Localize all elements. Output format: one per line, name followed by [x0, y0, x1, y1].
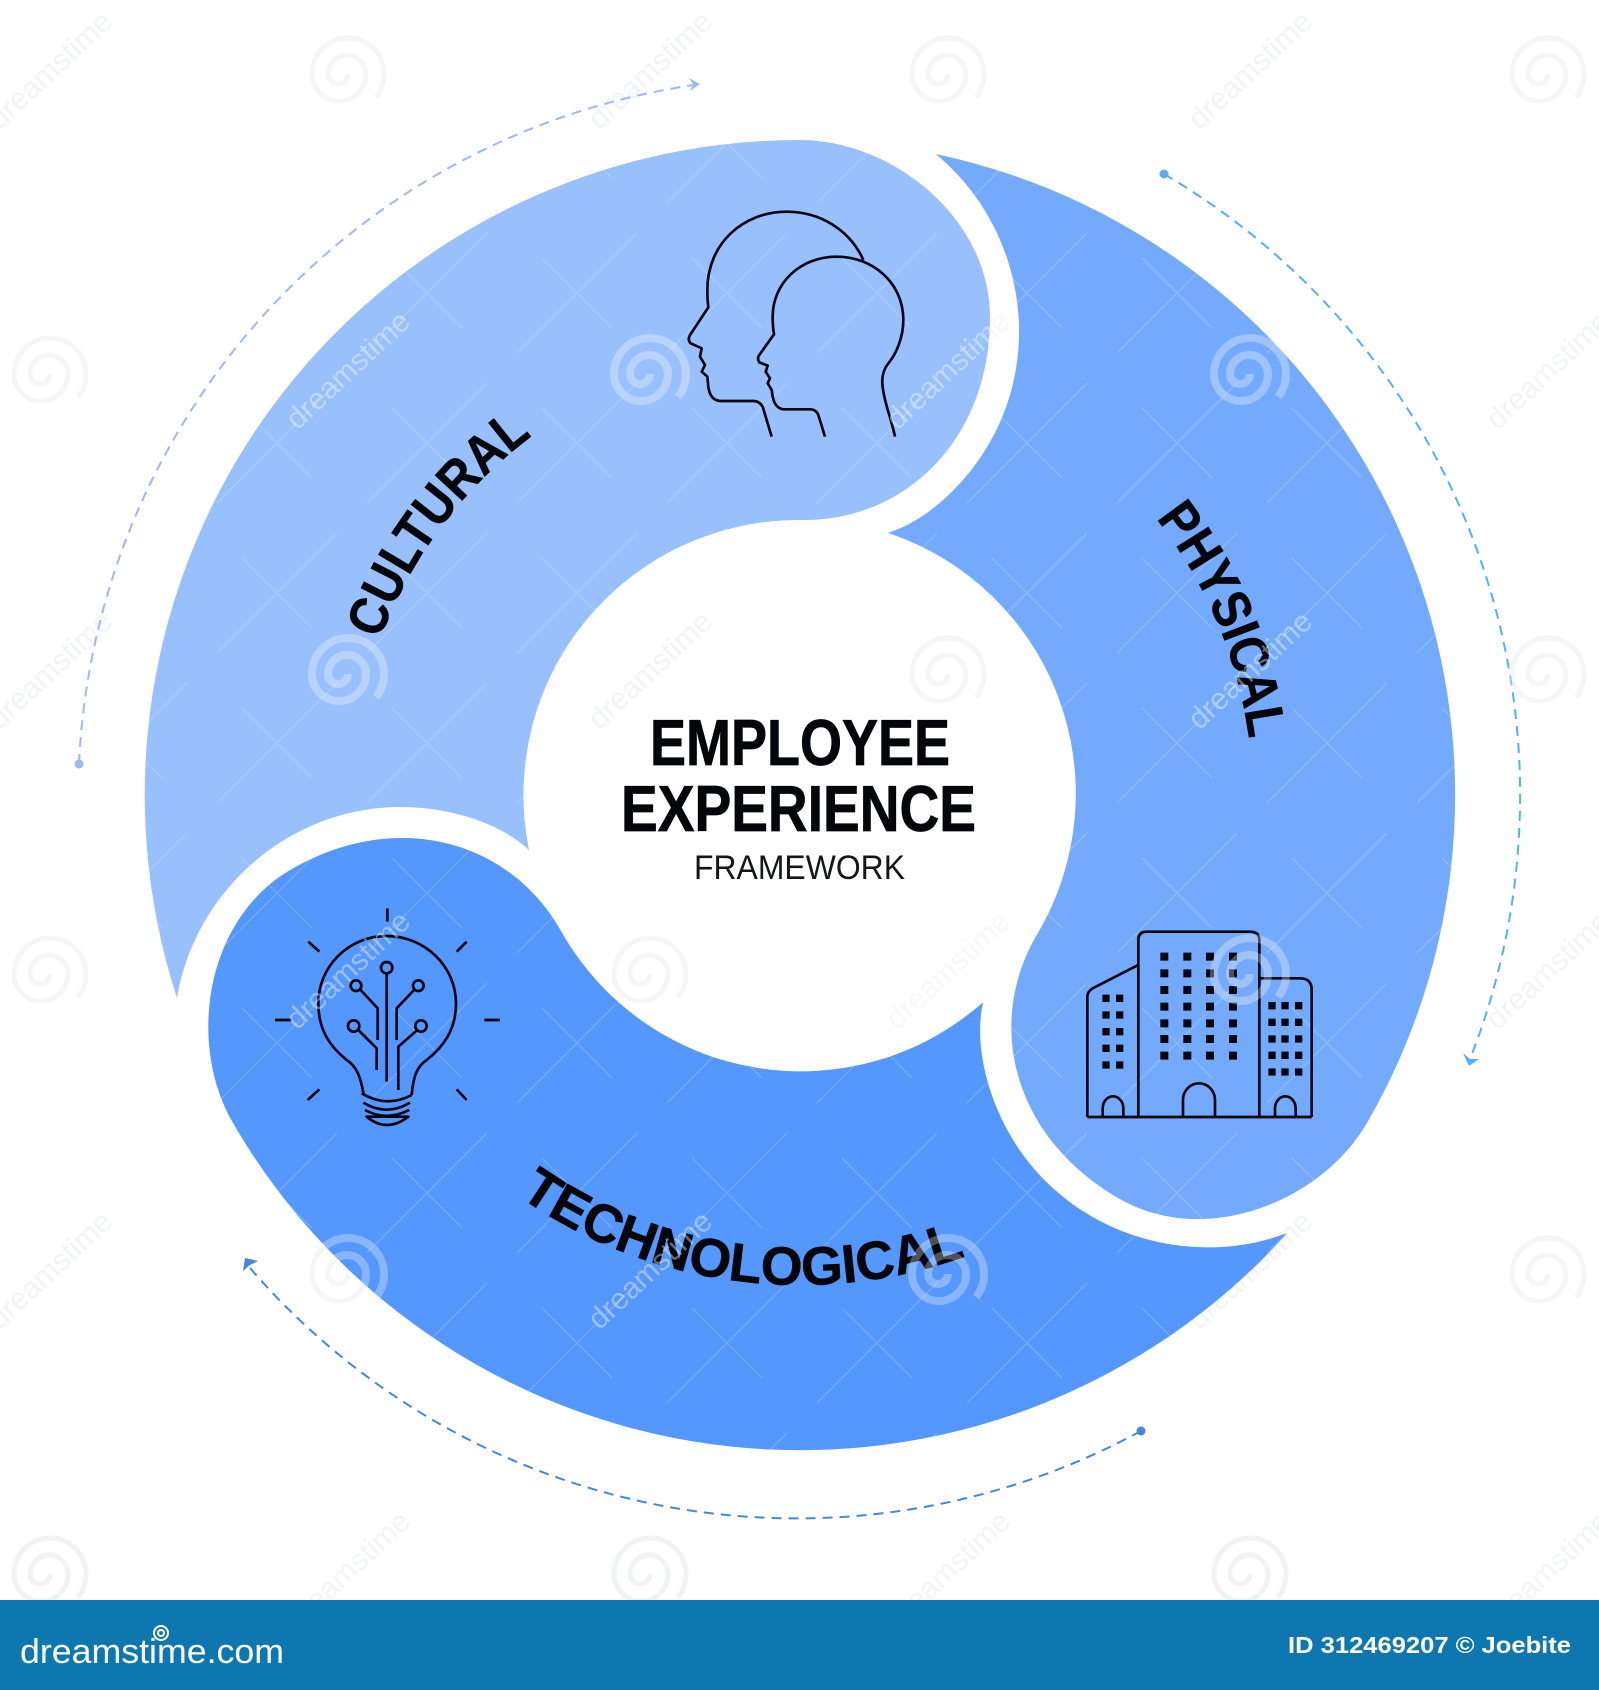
watermark layer on white background: dreamstime [582, 5, 719, 136]
heading: employee experience framework: EXPERIENCE [621, 772, 976, 845]
footer bar [0, 1600, 1599, 1690]
watermark layer over the segments: dreamstime [280, 905, 417, 1036]
watermark layer on white background: dreamstime [582, 605, 719, 736]
label: cultural: CULTURAL [350, 418, 532, 633]
icon: office buildings [1087, 932, 1312, 1117]
footer credit: ID 312469207 © Joebite [1288, 1632, 1571, 1658]
footer logo mark [154, 1626, 168, 1640]
watermark layer over the segments: dreamstime [880, 305, 1017, 436]
label: physical: PHYSICAL [1158, 498, 1284, 738]
watermark layer on white background: dreamstime [880, 905, 1017, 1036]
watermark layer over the segments: dreamstime [880, 905, 1017, 1036]
panel: physical segment [529, 126, 1599, 1287]
watermark layer over the segments [14, 38, 1584, 1336]
watermark cross lines on the segments [146, 144, 1454, 1450]
heading: employee experience framework: EMPLOYEE [650, 706, 950, 779]
panel: cultural segment [145, 140, 990, 998]
watermark layer on white background: dreamstime [880, 1505, 1017, 1636]
arrow: dashed arc around cultural [74, 78, 700, 768]
arrow: dashed arc around physical [1160, 170, 1520, 1066]
watermark layer on white background: dreamstime [1182, 605, 1319, 736]
watermark layer over the segments: dreamstime [280, 305, 417, 436]
footer logo text: dreamstime.com [20, 1633, 284, 1671]
panel: technological segment [138, 529, 1303, 1690]
arrow: dashed arc around technological [243, 1258, 1146, 1518]
label: technological: TECHNOLOGICAL [529, 1165, 964, 1286]
watermark layer on white background: dreamstime [280, 1505, 417, 1636]
watermark layer on white background: dreamstime [1182, 1205, 1319, 1336]
icon: two human heads [689, 212, 903, 437]
watermark layer over the segments: dreamstime [582, 1205, 719, 1336]
watermark layer on white background: dreamstime [880, 305, 1017, 436]
watermark layer over the segments: dreamstime [1182, 605, 1319, 736]
heading: employee experience framework [621, 706, 976, 887]
icon: light bulb with circuit [275, 908, 500, 1125]
heading: employee experience framework: FRAMEWORK [694, 849, 905, 887]
watermark layer on white background: dreamstime [1182, 5, 1319, 136]
